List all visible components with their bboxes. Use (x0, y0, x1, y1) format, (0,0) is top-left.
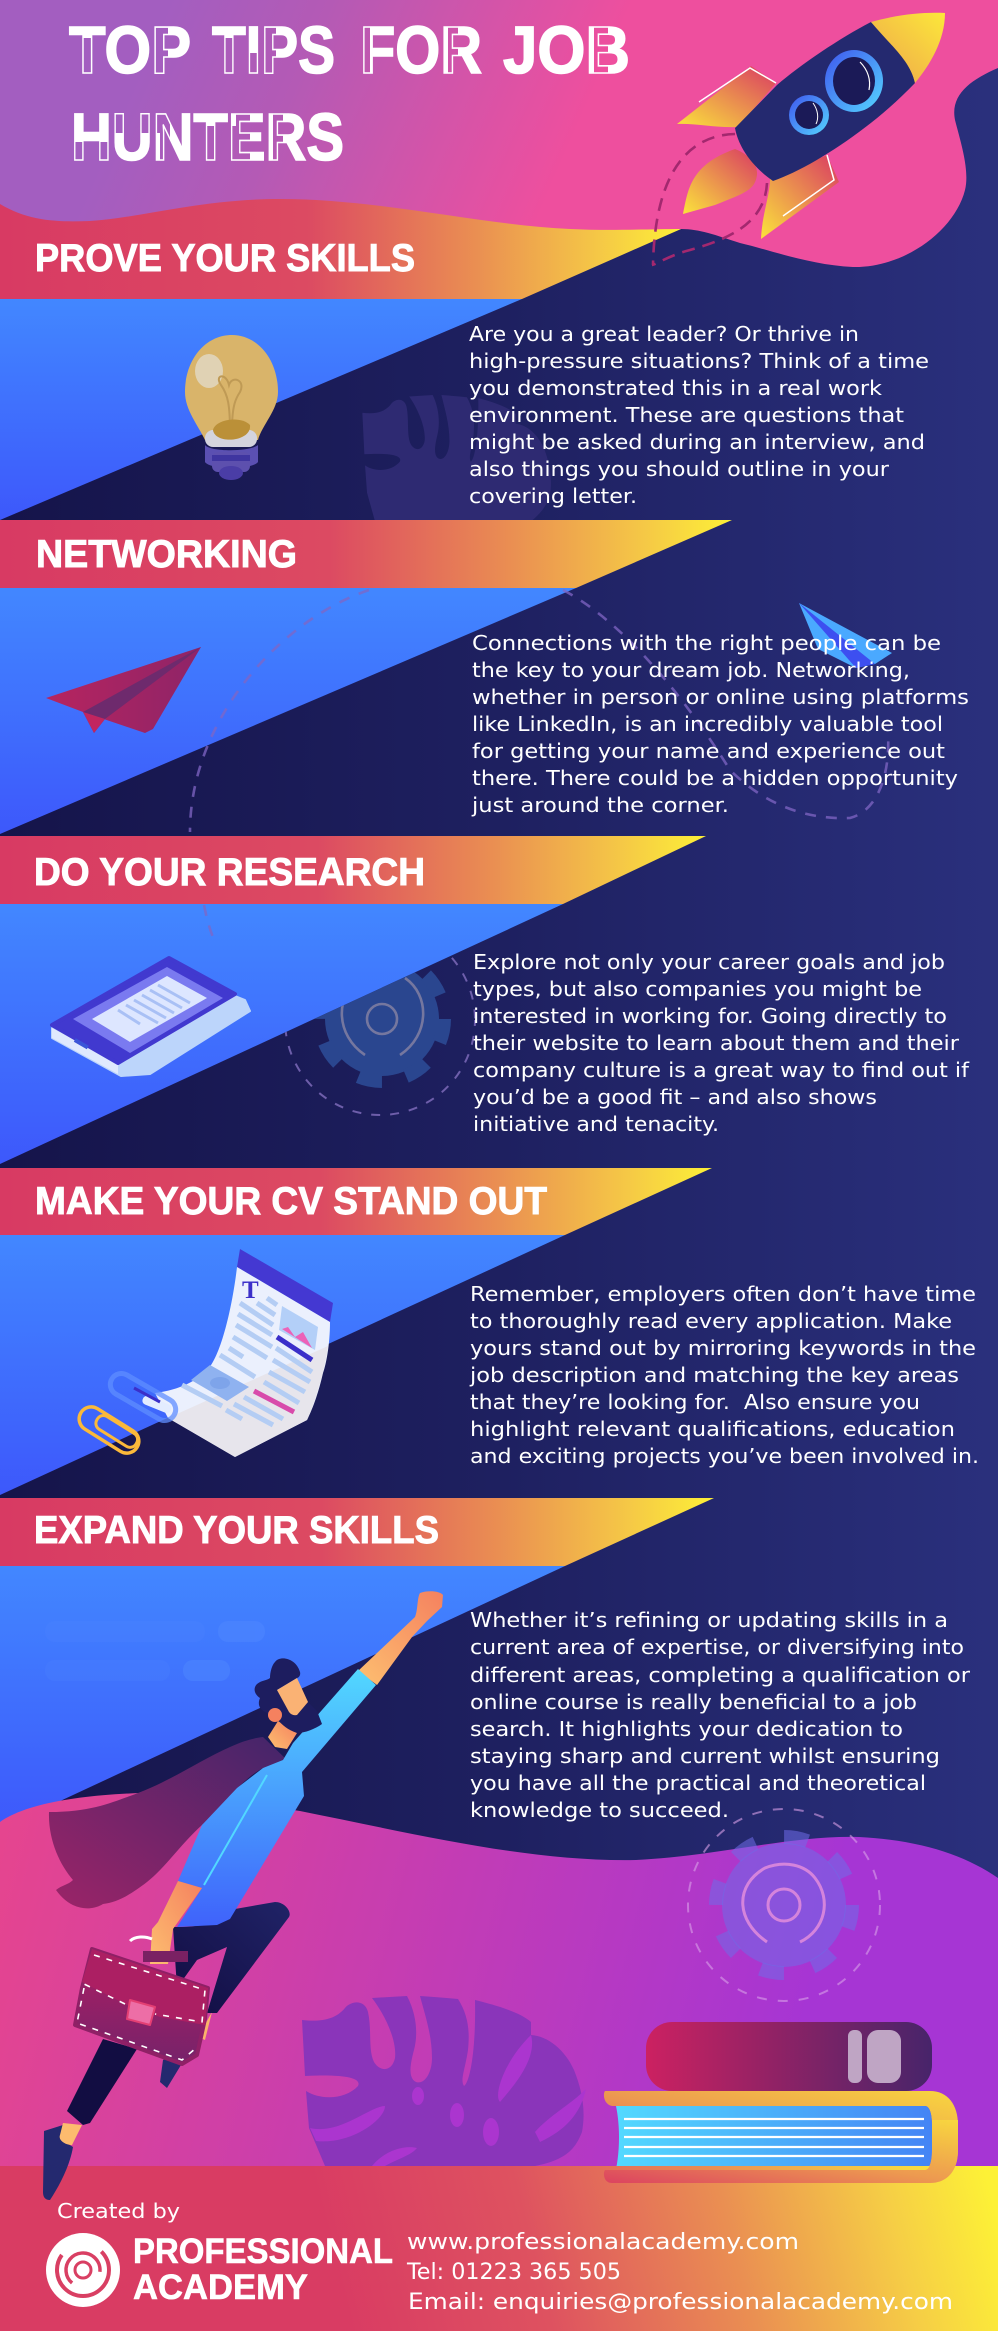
text: networking: the key to your dream job. Networking, (472, 658, 910, 682)
raised arm and fist (358, 1591, 443, 1685)
top book (646, 2022, 932, 2091)
text: networking: just around the corner. (471, 793, 729, 817)
title: TOP (69, 13, 190, 88)
text: make your cv stand out: job description and matching the key areas (469, 1363, 959, 1387)
cape (49, 1737, 287, 1908)
panel: expand your skills background (0, 1566, 565, 1829)
text: expand your skills: Whether it’s refining or updating skills in a (470, 1608, 948, 1632)
sleeve and torso (177, 1669, 376, 1927)
figure: flying superhero with briefcase (43, 1591, 443, 2200)
banner: expand your skills: EXPAND YOUR SKILLS (34, 1509, 439, 1552)
text: make your cv stand out (469, 1282, 979, 1468)
text: do your research: their website to learn about them and their (473, 1031, 960, 1055)
logo: professional academy: ACADEMY (133, 2268, 308, 2307)
title: HUNTERS (71, 100, 344, 175)
title (69, 13, 630, 175)
text: prove your skills: high-pressure situations? Think of a time (469, 349, 929, 373)
panel: networking background (0, 588, 576, 834)
text: expand your skills: knowledge to succeed. (470, 1798, 729, 1822)
logo: professional academy (46, 2232, 393, 2307)
text: prove your skills: might be asked during an interview, and (469, 430, 925, 454)
dashed flight paths (190, 590, 888, 832)
forearm and hand (150, 1881, 202, 1964)
rocket hull (735, 22, 915, 181)
icon: tablet (52, 958, 250, 1076)
text: networking: whether in person or online using platforms (472, 685, 969, 709)
text: make your cv stand out: that they’re looking for. Also ensure you (470, 1390, 920, 1414)
text: make your cv stand out: highlight relevant qualifications, education (470, 1417, 955, 1441)
banner: prove your skills: PROVE YOUR SKILLS (35, 237, 415, 280)
icon: rocket (652, 13, 945, 265)
icon: CV document (155, 1249, 333, 1457)
text: expand your skills: staying sharp and current whilst ensuring (470, 1744, 940, 1768)
banner: networking (0, 520, 732, 588)
panel: research background (0, 904, 563, 1164)
text: expand your skills: search. It highlights your dedication to (470, 1717, 903, 1741)
near foot (43, 2125, 73, 2200)
banner: do your research (0, 836, 706, 904)
bottom book (604, 2091, 958, 2183)
text: do your research (473, 950, 970, 1136)
icon: paper clips (75, 1369, 180, 1458)
banner: make your cv stand out: MAKE YOUR CV STAND OUT (35, 1180, 547, 1223)
text: do your research: Explore not only your career goals and job (473, 950, 945, 974)
text: prove your skills: environment. These are questions that (469, 403, 904, 427)
logo: professional academy: PROFESSIONAL (133, 2232, 393, 2271)
footer text (57, 2199, 953, 2315)
text: expand your skills: online course is really beneficial to a job (470, 1690, 917, 1714)
rocket trail (652, 134, 767, 265)
text: expand your skills: you have all the practical and theoretical (470, 1771, 926, 1795)
footer text: Created by (57, 2199, 180, 2223)
far foot (160, 2037, 198, 2088)
text: expand your skills: different areas, completing a qualification or (470, 1663, 971, 1687)
briefcase (75, 1937, 208, 2064)
text: networking: for getting your name and experience out (472, 739, 945, 763)
rocket windows (825, 50, 883, 112)
hair and beard (255, 1658, 322, 1733)
text: prove your skills: covering letter. (469, 484, 637, 508)
title: TIPS (212, 13, 335, 88)
faint bars (45, 1621, 265, 1681)
banner: expand your skills (0, 1498, 714, 1566)
icon: gear (688, 1809, 880, 2001)
banner: do your research: DO YOUR RESEARCH (34, 851, 425, 894)
text: expand your skills (470, 1608, 971, 1822)
text: make your cv stand out: and exciting projects you’ve been involved in. (470, 1444, 979, 1468)
text: prove your skills: Are you a great leader? Or thrive in (469, 322, 859, 346)
title: JOB (503, 13, 630, 88)
text: networking: there. There could be a hidden opportunity (472, 766, 958, 790)
title: FOR (360, 13, 482, 88)
face (277, 1678, 308, 1715)
text: do your research: company culture is a great way to find out if (473, 1058, 970, 1082)
icon: gear behind research (284, 957, 476, 1116)
icon: CV document: T (242, 1277, 259, 1304)
panel: prove your skills background (0, 299, 551, 531)
text: expand your skills: current area of expertise, or diversifying into (470, 1635, 964, 1659)
decorative leaf (362, 395, 551, 531)
text: do your research: types, but also companies you might be (473, 977, 922, 1001)
banner: prove your skills (0, 199, 681, 299)
footer text: www.professionalacademy.com (407, 2230, 799, 2255)
neck (268, 1721, 297, 1749)
text: make your cv stand out: yours stand out by mirroring keywords in the (470, 1336, 976, 1360)
icon: stack of books (604, 2022, 958, 2183)
icon: red paper plane (46, 647, 201, 733)
rocket fins (677, 66, 776, 127)
text: make your cv stand out: to thoroughly read every application. Make (470, 1309, 952, 1333)
text: prove your skills (469, 322, 929, 508)
text: prove your skills: you demonstrated this in a real work (469, 376, 882, 400)
bottom pink wave (0, 1793, 998, 2180)
text: do your research: initiative and tenacity. (473, 1112, 719, 1136)
icon: light bulb (185, 335, 278, 480)
text: networking: like LinkedIn, is an incredibly valuable tool (472, 712, 943, 736)
banner: networking: NETWORKING (36, 533, 297, 576)
header background wave (0, 0, 998, 300)
text: networking: Connections with the right people can be (472, 631, 941, 655)
banner: make your cv stand out (0, 1168, 712, 1235)
dashed arc on research panel (204, 905, 214, 940)
footer band (0, 2166, 998, 2331)
text: networking (471, 631, 969, 817)
footer text: Email: enquiries@professionalacademy.com (408, 2290, 953, 2315)
panel: cv background (0, 1235, 565, 1495)
text: do your research: interested in working for. Going directly to (473, 1004, 947, 1028)
text: make your cv stand out: Remember, employers often don’t have time (470, 1282, 976, 1306)
icon: blue paper plane (799, 603, 892, 668)
decorative monstera leaf (302, 1996, 586, 2166)
text: do your research: you’d be a good fit – and also shows (473, 1085, 877, 1109)
text: prove your skills: also things you should outline in your (469, 457, 890, 481)
bottom book over footer (604, 2120, 958, 2183)
legs (173, 1902, 290, 2013)
footer text: Tel: 01223 365 505 (406, 2260, 621, 2285)
